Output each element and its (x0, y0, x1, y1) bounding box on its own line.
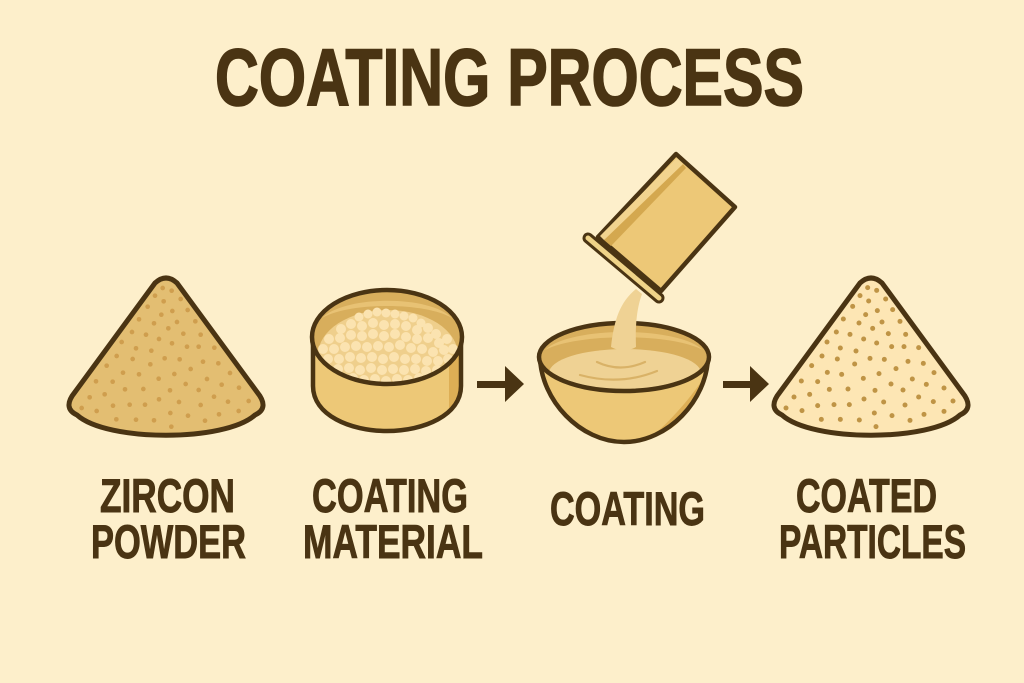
label: zircon powder (91, 469, 246, 568)
label: coated particles (779, 469, 966, 568)
label: coating material (303, 469, 483, 568)
icon: coating material cup (312, 290, 462, 431)
icon: coated particles cone (774, 278, 968, 435)
arrow: material to coating (477, 366, 524, 402)
label: zircon powder: ZIRCON (100, 469, 235, 522)
icon: zircon powder cone (69, 278, 263, 435)
title: COATING PROCESS (215, 33, 804, 123)
label: zircon powder: POWDER (91, 515, 246, 568)
pouring stream (611, 289, 642, 350)
icon: mixing bowl with coating liquid (539, 323, 709, 442)
icon: tilted container pouring (588, 154, 735, 298)
arrow: coating to coated particles (723, 366, 769, 402)
label: coating: COATING (550, 482, 705, 535)
label: coating material: COATING (312, 469, 468, 522)
label: coated particles: COATED (796, 469, 937, 522)
ripples in liquid (580, 362, 657, 380)
label: coating material: MATERIAL (303, 515, 483, 568)
